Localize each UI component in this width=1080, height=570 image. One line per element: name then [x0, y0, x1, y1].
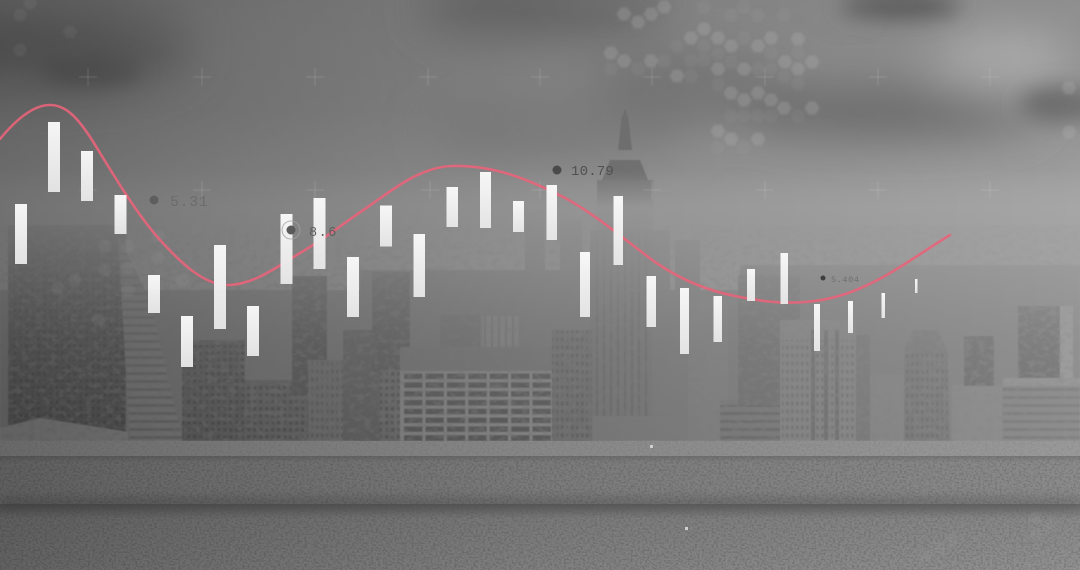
low left buildings [0, 418, 128, 441]
grid crosses [79, 68, 999, 199]
right cluster [780, 306, 1080, 441]
candlestick bars [15, 122, 918, 367]
concrete ledge [0, 441, 1080, 570]
data label: 8.6 with ring marker [282, 221, 338, 241]
empire state style tower [590, 110, 653, 420]
distant skyline [0, 210, 1080, 445]
background: cloudy sky [0, 0, 1080, 441]
data label: 5.31: 5.31 [170, 194, 208, 211]
data label: 10.79 [552, 164, 614, 180]
red trend line [0, 105, 950, 303]
hexagon pattern: top right [604, 1, 1076, 153]
city skyline [0, 110, 1080, 445]
data label: 5.31 [150, 194, 208, 211]
ledge specks [650, 445, 688, 530]
left tower [8, 225, 183, 441]
data label: 10.79: 10.79 [571, 164, 614, 180]
data label: 5.404: 5.404 [831, 275, 860, 285]
central stepped building [380, 347, 553, 441]
data label: 8.6 with ring marker: 8.6 [309, 226, 338, 241]
